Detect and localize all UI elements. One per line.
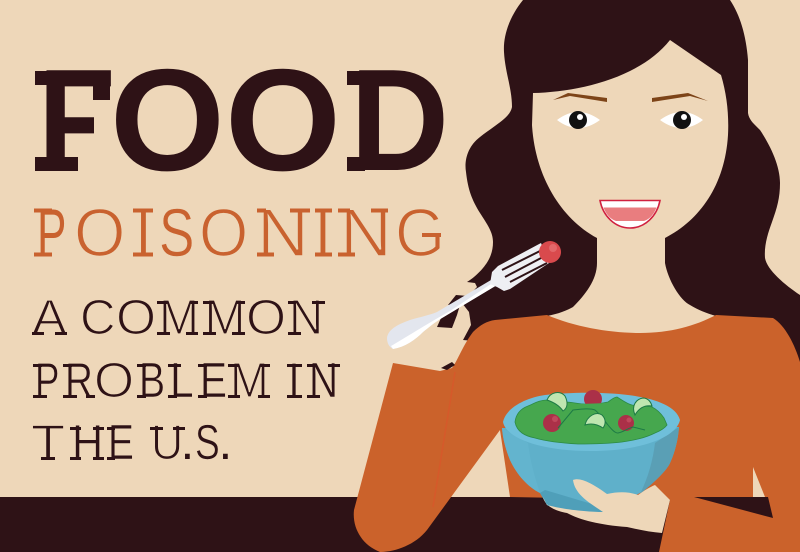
- hand holding bowl: [543, 479, 670, 533]
- slab serifs for POISONING: [34, 208, 441, 256]
- text: D: [350, 39, 449, 201]
- eating hand details: [437, 290, 478, 370]
- trim of F middle bar: [94, 101, 113, 135]
- text: O: [199, 195, 248, 271]
- text: E: [108, 415, 134, 470]
- text: B: [139, 353, 165, 408]
- text: T: [31, 415, 65, 470]
- cucumber slices: [547, 393, 652, 428]
- slab serifs for tagline: [32, 301, 340, 460]
- text: M: [230, 353, 268, 408]
- face and neck: [532, 40, 728, 348]
- gap between arm and torso: [753, 467, 765, 497]
- text: N: [256, 195, 308, 271]
- hair: [462, 0, 800, 370]
- text: S: [195, 415, 220, 470]
- text: O: [225, 39, 341, 201]
- text: F: [38, 39, 115, 201]
- text: .: [180, 415, 194, 470]
- text: L: [170, 353, 194, 408]
- sweater: [354, 315, 800, 552]
- text: R: [65, 353, 93, 408]
- left eyebrow: [553, 93, 607, 102]
- text: I: [314, 195, 332, 271]
- title: FOOD: [38, 39, 449, 201]
- bowl rim: [503, 393, 680, 451]
- subtitle: POISONING: [37, 195, 445, 271]
- text: O: [110, 39, 224, 201]
- text: I: [134, 195, 153, 271]
- text: I: [287, 353, 301, 408]
- fork: [387, 243, 549, 349]
- text: G: [395, 195, 445, 271]
- text: .: [218, 415, 232, 470]
- tomato on fork: [539, 241, 561, 263]
- text: O: [94, 353, 134, 408]
- text: N: [340, 195, 391, 271]
- salad bowl: [502, 390, 680, 512]
- right eyebrow: [652, 93, 708, 102]
- left eye: [557, 111, 600, 129]
- text: O: [74, 195, 125, 271]
- text: P: [37, 195, 66, 271]
- bowl body: [502, 427, 679, 512]
- mouth: [600, 200, 660, 228]
- text: O: [246, 290, 286, 345]
- bowl left highlight: [502, 428, 540, 493]
- text: A: [32, 290, 67, 345]
- slab serifs for FOOD: [35, 71, 365, 171]
- text: N: [289, 290, 324, 345]
- text: S: [159, 195, 194, 271]
- lettuce fold lines: [558, 409, 645, 433]
- text: H: [72, 415, 103, 470]
- text: N: [309, 353, 338, 408]
- text: C: [80, 290, 115, 345]
- text: E: [200, 353, 227, 408]
- tomatoes in salad: [543, 390, 634, 432]
- right eye: [660, 111, 703, 129]
- text: M: [204, 290, 246, 345]
- woman illustration: [354, 0, 800, 552]
- text: O: [116, 290, 156, 345]
- salad greens: [515, 397, 667, 444]
- text: U: [151, 415, 184, 470]
- table gap under arm: [694, 497, 773, 518]
- tagline line 3: [31, 415, 232, 470]
- text: P: [35, 353, 60, 408]
- sleeve fold: [433, 372, 455, 507]
- table band: [0, 497, 800, 552]
- bowl shading: [640, 427, 679, 494]
- text: M: [158, 290, 198, 345]
- tagline line 2: [35, 353, 338, 408]
- tagline line 1: [32, 290, 324, 345]
